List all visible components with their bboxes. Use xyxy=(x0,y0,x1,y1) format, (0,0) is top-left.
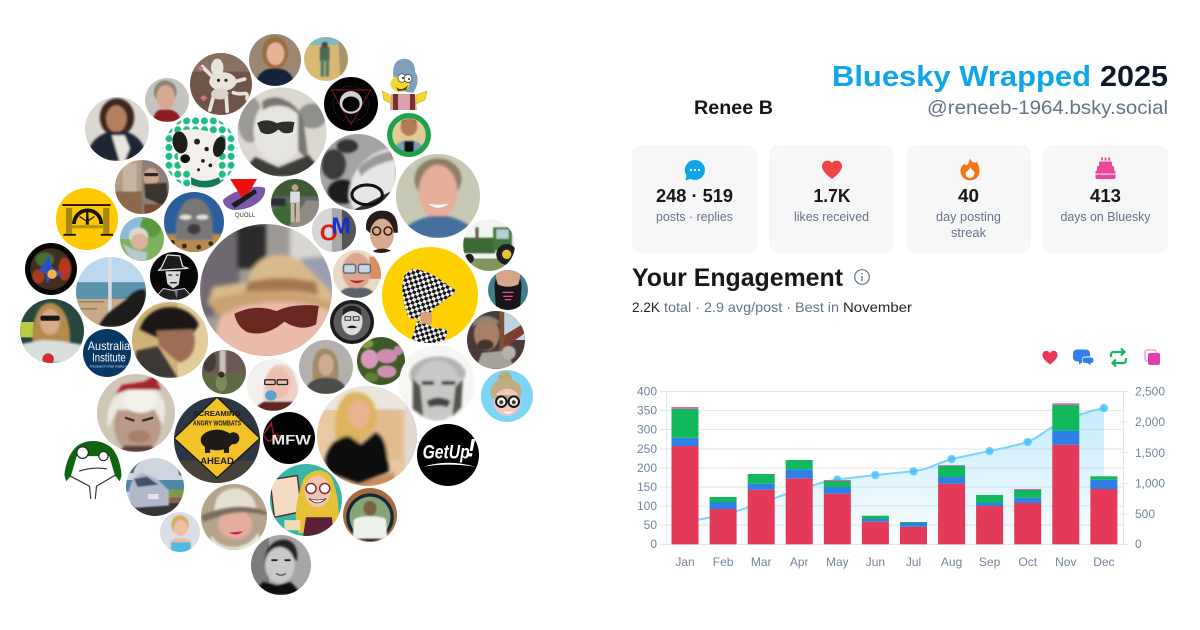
avatar: blonde woman blowing bubble xyxy=(247,359,299,411)
heading: your engagement: Your Engagement xyxy=(632,264,844,292)
avatar: cartoon woman with blue hair xyxy=(382,59,427,110)
left axis labels: 200 xyxy=(637,461,657,475)
avatar: OM monogram: M xyxy=(332,213,351,239)
stat card: posts and replies: 248 · 519 xyxy=(656,185,733,206)
engagement summary: 2.2K xyxy=(632,299,661,315)
month labels: Sep xyxy=(979,555,1001,569)
right axis labels: 1,000 xyxy=(1135,476,1165,490)
left axis labels: 400 xyxy=(637,384,657,398)
avatar: green tractor xyxy=(463,219,517,272)
avatar: man with glasses and red lips xyxy=(333,250,381,298)
month labels: Dec xyxy=(1093,555,1115,569)
grid lines xyxy=(660,391,1128,544)
stat card: likes received: likes received xyxy=(794,210,869,224)
month labels: May xyxy=(826,555,849,569)
avatar: Australia Institute logo: Australia xyxy=(88,339,130,353)
chart: monthly engagement stacked bars with cumulative line xyxy=(637,384,1165,569)
stat card: day posting streak: 40 xyxy=(958,185,979,206)
avatar: astronaut helmet on black xyxy=(324,77,378,131)
cumulative area and line xyxy=(685,408,1104,544)
avatar: woman from behind in arch xyxy=(343,488,397,542)
avatar: pencil sketch of man in cap xyxy=(399,345,475,421)
avatar: captain logo xyxy=(223,179,265,219)
cumulative points xyxy=(834,404,1108,483)
avatar: smiling man xyxy=(396,154,480,238)
right axis labels: 0 xyxy=(1135,537,1142,551)
avatar: grandma in park xyxy=(120,216,164,261)
avatar: yellow bridge logo xyxy=(56,188,118,250)
icon: chat bubble xyxy=(685,160,705,180)
avatar: big photo woman in straw hat xyxy=(200,224,332,356)
avatar: woman with round glasses xyxy=(366,210,398,253)
avatar: Australia Institute logo: Research that matters xyxy=(90,364,128,368)
left axis labels: 350 xyxy=(637,404,657,418)
avatar: GetUp! logo xyxy=(417,424,479,486)
left axis labels: 50 xyxy=(644,518,657,532)
right axis labels xyxy=(1135,384,1165,551)
stat card: days on Bluesky: 413 xyxy=(1090,185,1121,206)
stat card: day posting streak xyxy=(906,145,1031,253)
stat card: days on Bluesky xyxy=(1043,145,1168,253)
avatar: GetUp! logo: GetUp xyxy=(423,443,470,464)
avatar: black and white man with mustache xyxy=(330,300,374,344)
month labels: Jun xyxy=(866,555,885,569)
avatar: silver car at Sydney Harbour xyxy=(126,456,184,517)
engagement summary: November xyxy=(843,299,912,315)
bars: likes xyxy=(672,445,1117,544)
chart legend xyxy=(1042,348,1160,366)
stat card: likes received xyxy=(769,145,894,253)
bars: quotes xyxy=(672,403,1079,490)
bars: reposts xyxy=(672,405,1117,523)
avatar: frog meme xyxy=(64,440,122,499)
left axis labels: 250 xyxy=(637,442,657,456)
right axis labels: 500 xyxy=(1135,507,1155,521)
avatar: beach with dark dog xyxy=(76,257,146,327)
avatar: mouse graffiti xyxy=(190,53,252,115)
avatar: black and white glasses xyxy=(320,134,396,210)
avatar: black and white woman xyxy=(251,535,311,595)
avatar: fire art on black xyxy=(25,243,77,295)
right axis labels: 2,500 xyxy=(1135,384,1165,398)
avatar: cartoon blonde with bun xyxy=(481,370,533,422)
avatar: woman leaning xyxy=(115,160,169,215)
title: Bluesky Wrapped xyxy=(832,61,1091,93)
avatar: woman with sunglasses and curly hair xyxy=(20,299,84,365)
avatar: cartoon woman with long blonde hair xyxy=(270,464,342,536)
month labels: Feb xyxy=(713,555,734,569)
avatar: woman by waterfall xyxy=(202,349,246,395)
stat card: day posting streak: streak xyxy=(951,226,987,240)
month labels: Aug xyxy=(941,555,962,569)
month labels: Apr xyxy=(790,555,809,569)
icon: heart xyxy=(822,161,842,179)
avatar: Australia Institute logo: Institute xyxy=(92,351,126,365)
icon: replies bubbles xyxy=(1073,350,1094,366)
avatar: fedora sketch on black xyxy=(150,252,198,300)
month labels: Oct xyxy=(1018,555,1038,569)
avatar: MFW logo xyxy=(263,412,315,464)
stat card: likes received: 1.7K xyxy=(814,185,851,206)
avatar: screaming angry wombats sign: SCREAMING xyxy=(193,409,241,418)
month labels: Jan xyxy=(675,555,695,569)
avatar: black and white woman with sunglasses xyxy=(238,88,326,176)
avatar: captain logo: QUOLL xyxy=(235,213,256,219)
avatar: person in garden xyxy=(271,179,319,227)
avatar: man with green ring xyxy=(387,113,431,157)
month labels: Nov xyxy=(1055,555,1076,569)
avatar: screaming angry wombats sign xyxy=(174,397,260,483)
avatar: Australia Institute logo xyxy=(83,329,131,377)
left axis labels: 0 xyxy=(650,537,657,551)
icon: quotes squares xyxy=(1145,350,1160,365)
avatar: screaming angry wombats sign: AHEAD xyxy=(200,456,234,467)
avatar: pink flowers xyxy=(357,337,405,385)
avatar: blonde with blue top xyxy=(160,512,200,553)
right axis labels: 1,500 xyxy=(1135,446,1165,460)
icon: likes heart xyxy=(1042,351,1058,364)
avatar: blonde woman indoors xyxy=(299,340,353,394)
left axis labels: 150 xyxy=(637,480,657,494)
bars: replies xyxy=(672,431,1117,527)
avatar: shaggy dog on leopard print xyxy=(164,192,224,253)
title: 2025 xyxy=(1100,61,1168,93)
avatar: woman in dark blazer xyxy=(85,97,149,161)
icon: birthday cake xyxy=(1096,158,1116,179)
icon: flame xyxy=(960,158,980,180)
avatar: screaming angry wombats sign: ANGRY WOMBATS xyxy=(193,418,241,427)
stat card: day posting streak: day posting xyxy=(936,210,1001,224)
avatar: dalmatian on green dots xyxy=(163,115,237,189)
engagement summary xyxy=(632,299,912,315)
stat card: posts and replies xyxy=(632,145,757,253)
avatar: GetUp! logo: ! xyxy=(467,435,476,462)
left axis labels: 100 xyxy=(637,499,657,513)
avatar: man with dark hair xyxy=(132,302,208,378)
icon: reposts arrows xyxy=(1111,348,1126,366)
avatar: man with cat by window xyxy=(467,311,525,369)
engagement summary: total · 2.9 avg/post · Best in xyxy=(664,299,839,315)
avatar: woman in zigzag hat on yellow xyxy=(382,247,478,343)
avatar: blonde woman on stairs xyxy=(317,386,417,488)
month labels xyxy=(675,555,1115,569)
month labels: Jul xyxy=(906,555,921,569)
left axis labels xyxy=(637,384,657,551)
month labels: Mar xyxy=(751,555,772,569)
right axis labels: 2,000 xyxy=(1135,415,1165,429)
avatar cluster xyxy=(20,34,533,595)
avatar: older woman xyxy=(145,78,189,122)
handle: @reneeb-1964.bsky.social xyxy=(927,97,1168,119)
left axis labels: 300 xyxy=(637,422,657,436)
avatar: woman in navy top xyxy=(249,34,301,86)
avatar: MFW logo: MFW xyxy=(271,431,312,447)
display name: Renee B xyxy=(694,98,773,119)
avatar: OM monogram xyxy=(312,208,356,252)
avatar: soldier in desert xyxy=(304,37,348,81)
avatar: OM monogram: O xyxy=(320,220,338,246)
avatar: woman in white fur hat xyxy=(201,484,267,550)
stat card: posts and replies: posts · replies xyxy=(656,210,733,224)
avatar: woman in black tank top xyxy=(488,270,528,310)
stat card: days on Bluesky: days on Bluesky xyxy=(1060,210,1151,224)
icon: info xyxy=(855,270,869,284)
avatar: grumpy man with santa hat xyxy=(97,374,175,454)
